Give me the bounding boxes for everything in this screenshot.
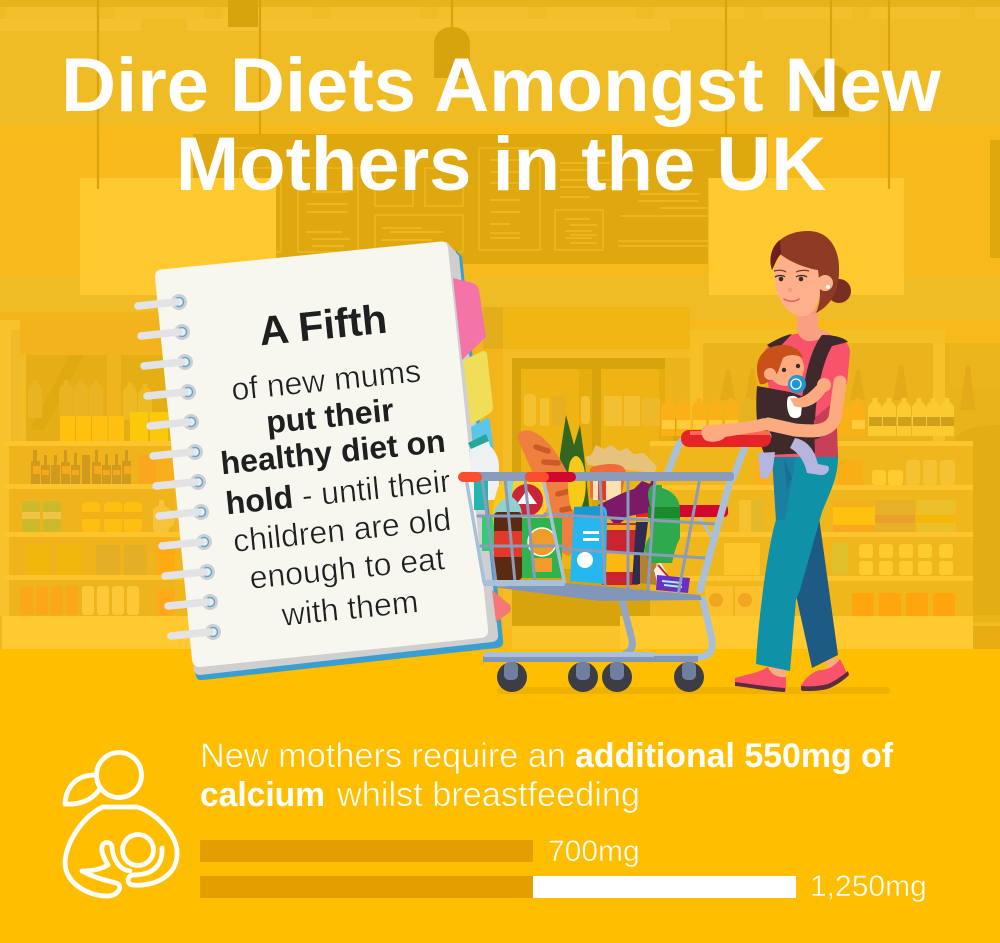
calcium bar chart: 1,250mg: [810, 870, 927, 903]
title: Dire Diets Amongst New: [61, 43, 942, 128]
notebook text: enough to eat: [248, 540, 446, 596]
head: [770, 231, 851, 317]
notebook back cover: [194, 250, 503, 680]
cart top rail: [462, 472, 734, 481]
notebook tabs: [453, 278, 511, 622]
neck: [797, 308, 830, 341]
floor: [0, 649, 1000, 943]
calcium statement: additional 550mg of: [575, 737, 894, 775]
notebook text: put their: [264, 392, 395, 440]
wheels: [497, 662, 704, 692]
notebook text: hold - until their: [224, 463, 452, 521]
red grips: [458, 430, 771, 482]
groceries: [468, 415, 690, 593]
hanging signs and lamps: [80, 0, 1000, 295]
notebook text: A Fifth: [257, 296, 389, 354]
title: Mothers in the UK: [176, 122, 826, 207]
calcium statement: [200, 737, 894, 814]
notebook text: children are old: [231, 501, 453, 559]
notebook page edge: [193, 241, 498, 675]
cart lower bars: [492, 583, 702, 601]
baby carrier: [756, 334, 848, 455]
shirt: [765, 333, 850, 457]
supermarket background: [0, 0, 1000, 652]
menu board: [193, 134, 768, 264]
notebook text: with them: [279, 583, 420, 633]
right shelving unit: [620, 330, 1000, 650]
calcium statement: calcium: [200, 776, 325, 814]
notebook text: healthy diet on: [219, 423, 447, 481]
mother's arm: [768, 382, 840, 431]
front leg: [756, 457, 838, 671]
baby: [757, 345, 831, 479]
notebook text: [219, 296, 453, 633]
centre fridge doors: [483, 307, 693, 650]
front shoe: [735, 660, 786, 692]
back leg: [786, 510, 838, 668]
notebook text: of new mums: [230, 352, 422, 408]
floor shadow: [497, 687, 890, 694]
spiral binding: [138, 294, 221, 640]
notebook page: [155, 241, 488, 667]
shopping cart: [458, 415, 771, 692]
notebook: [138, 241, 511, 680]
cart frame: [466, 436, 768, 657]
title: [61, 43, 942, 207]
left shelving unit: [0, 320, 202, 649]
back shoe: [801, 658, 849, 691]
breastfeeding icon: [65, 752, 177, 896]
mother with baby: [735, 231, 851, 692]
calcium bar chart: 700mg: [548, 835, 640, 868]
calcium statement: New mothers require an: [200, 737, 566, 775]
back handle bar: [636, 505, 728, 517]
mother's hand on cart: [701, 418, 768, 442]
calcium bar chart: [200, 835, 927, 903]
calcium statement: whilst breastfeeding: [336, 776, 640, 814]
